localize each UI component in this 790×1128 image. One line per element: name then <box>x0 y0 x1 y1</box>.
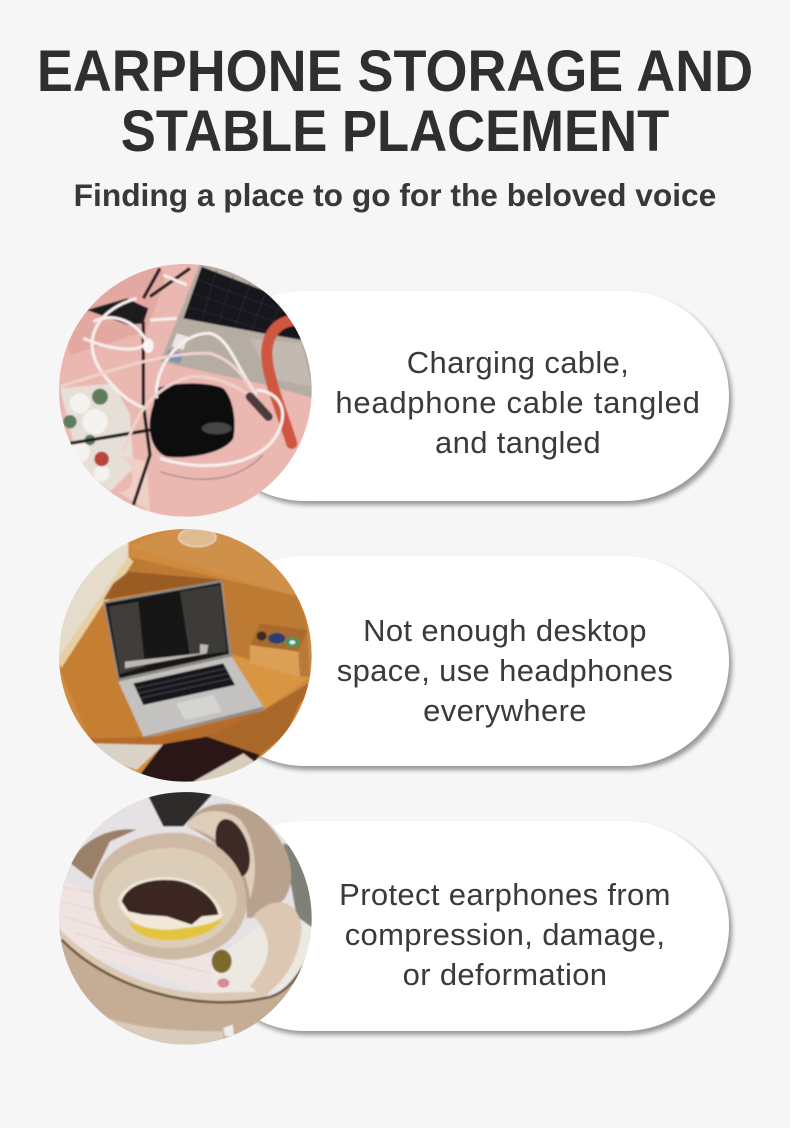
pill card 3 <box>200 821 729 1031</box>
photo: tangled cables on a desk <box>59 264 312 517</box>
title: EARPHONE STORAGE AND <box>37 39 753 104</box>
text: limited desktop space: space, use headphones <box>337 653 673 688</box>
text: tangled cables: Charging cable, <box>407 345 629 380</box>
text: limited desktop space: Not enough desktop <box>363 613 647 648</box>
panel: tangled cables <box>59 264 735 517</box>
title: STABLE PLACEMENT <box>121 99 669 164</box>
panel: limited desktop space <box>59 529 735 782</box>
subtitle: Finding a place to go for the beloved voice <box>74 177 716 213</box>
text: limited desktop space <box>337 613 673 728</box>
text: protecting earphones: or deformation <box>403 957 607 992</box>
text: protecting earphones: compression, damage, <box>345 917 665 952</box>
text: protecting earphones: Protect earphones from <box>339 877 671 912</box>
text: protecting earphones <box>339 877 671 992</box>
panel: protecting earphones <box>59 792 735 1045</box>
text: limited desktop space: everywhere <box>423 693 587 728</box>
pill card 2 <box>200 556 729 766</box>
photo: laptop on a corner wooden desk <box>59 529 312 782</box>
title <box>37 39 753 164</box>
text: tangled cables: headphone cable tangled <box>335 385 701 420</box>
photo: damaged beige headphones <box>59 792 312 1045</box>
text: tangled cables <box>335 345 701 460</box>
pill card 1 <box>200 291 729 501</box>
text: tangled cables: and tangled <box>435 425 601 460</box>
